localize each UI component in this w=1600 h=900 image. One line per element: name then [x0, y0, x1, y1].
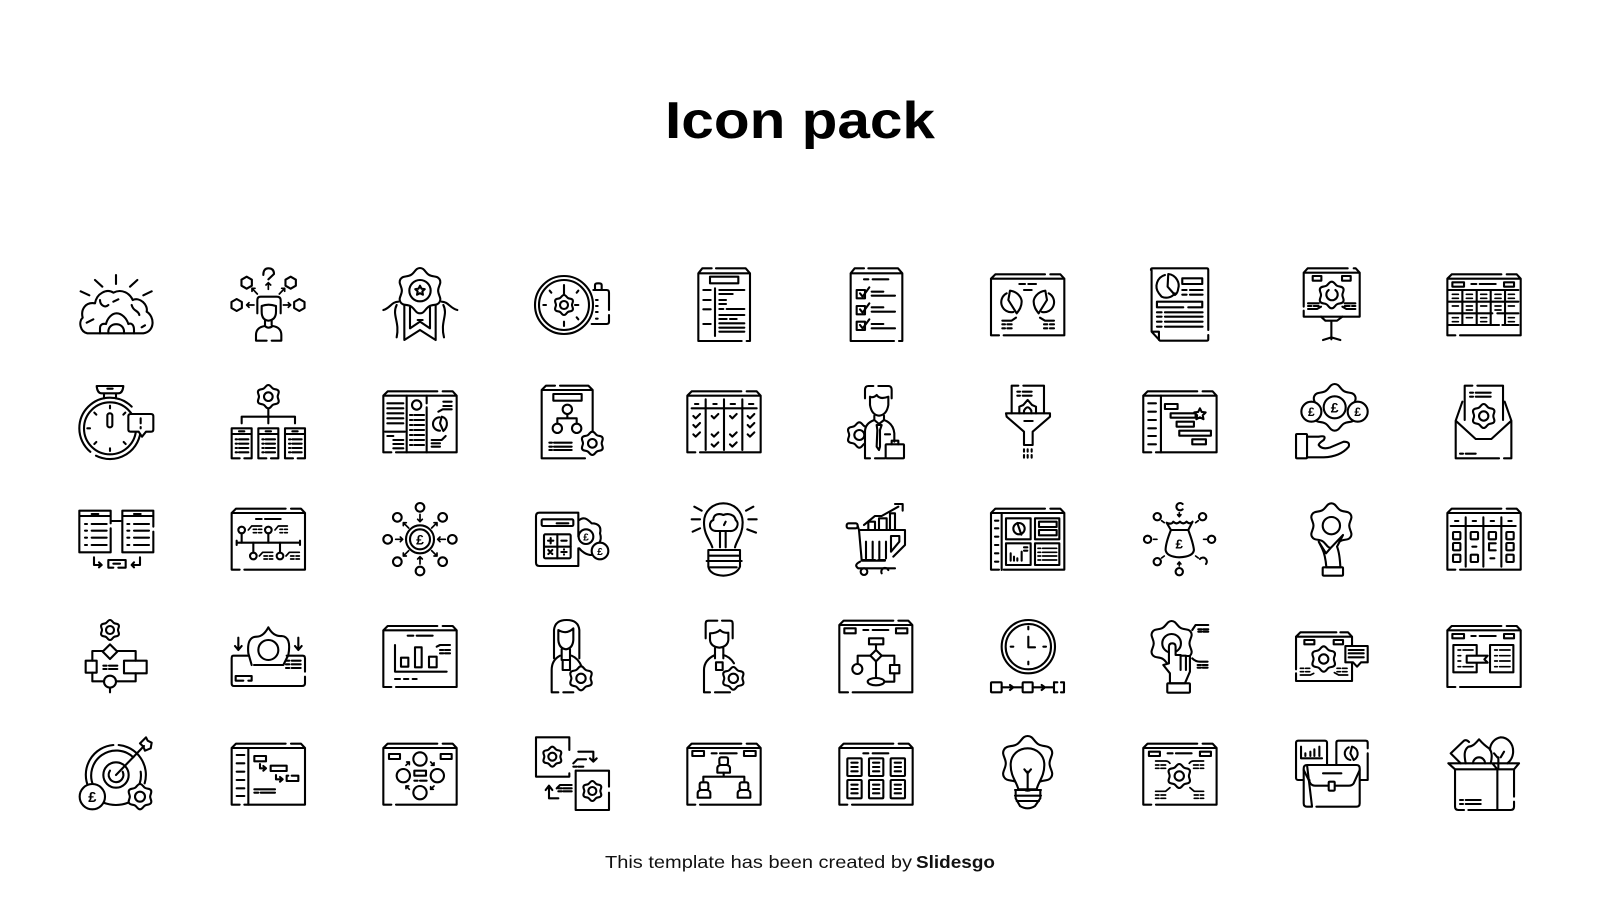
icon: two lists with arrows [79, 511, 153, 568]
icon: gear window with speech bubble [1296, 632, 1368, 681]
footer credit [605, 852, 995, 872]
icon: light bulb in gear [1003, 736, 1052, 808]
icon: target with dart, coin and gear: £ [88, 790, 96, 806]
icon: envelope with gear letter [1456, 386, 1511, 458]
icon: money bag with radial circles: £ [1176, 536, 1184, 551]
icon: calculator with pound coins: £ [583, 532, 589, 543]
icon: gear window with legends [1143, 744, 1217, 805]
icon: presentation board with gear [1304, 268, 1360, 340]
icon: finger touching gear [1152, 621, 1208, 693]
icon: award medal [383, 268, 457, 340]
icon: hand holding pound coins [1296, 384, 1368, 458]
icon: gear in tray with arrows [232, 627, 305, 686]
icon: table with status boxes [1447, 509, 1521, 570]
icon: briefcase with charts [1296, 741, 1368, 807]
icon: calendar grid [1447, 274, 1521, 335]
icon: layout window with columns [383, 391, 457, 452]
icon: timeline window [232, 509, 305, 570]
icon: hand holding gear [1311, 503, 1351, 576]
icon: pound hub with radial arrows: £ [416, 531, 424, 547]
icon: two documents exchanging [536, 737, 609, 810]
icon: gantt window with star [1143, 391, 1217, 452]
icon: cards window [839, 744, 913, 805]
icon: document with lines [698, 268, 750, 341]
icon: businesswoman with gear [552, 620, 592, 692]
icon: box of ideas [1448, 737, 1519, 810]
footer credit: This template has been created by [605, 852, 912, 872]
icon: bar chart window [383, 626, 457, 687]
icon: person with hexagon ideas [231, 268, 305, 341]
icon: flowchart window [839, 621, 912, 692]
icon: calculator with pound coins [536, 513, 608, 566]
icon: dashboard window [991, 509, 1064, 570]
icon: dial with gear and clip [535, 276, 609, 334]
icon: money bag with radial circles [1144, 503, 1215, 575]
title: Icon pack [665, 92, 935, 150]
icon: table with check marks [687, 391, 761, 452]
icon: businessman with gear and briefcase [848, 386, 904, 458]
icon: target with dart, coin and gear [80, 737, 152, 809]
icon: paper report with pie [1151, 268, 1208, 341]
icon: org chart window [687, 744, 761, 805]
icon: brain with rays [80, 275, 153, 333]
icon: funnel filtering document [1006, 386, 1050, 458]
icon: shopping cart with growth chart [847, 504, 905, 575]
icon: gear organising three tables [232, 385, 305, 458]
icon: checklist document [851, 268, 902, 341]
icon: hand holding pound coins: £ [1354, 405, 1361, 419]
icon: flow diagram with gear [86, 620, 147, 692]
icon: stopwatch with alert bubble [79, 386, 153, 459]
icon: light bulb with brain [692, 503, 757, 576]
icon: cycle window [383, 744, 457, 805]
footer credit: Slidesgo [916, 852, 995, 872]
icon: window with two pie charts [991, 274, 1064, 335]
icon: hand holding pound coins: £ [1308, 405, 1315, 419]
icon: pound hub with radial arrows [383, 503, 457, 575]
icon: gantt flow window [232, 744, 305, 805]
icon: businessman with small gear [704, 621, 744, 692]
icon: calculator with pound coins: £ [597, 547, 603, 558]
icon: document with org chart and gear [542, 386, 603, 458]
icon: clock with timeline [991, 620, 1064, 692]
icon grid [79, 268, 1521, 810]
icon: hand holding pound coins: £ [1331, 399, 1339, 415]
icon: two lists joined by ribbon window [1447, 626, 1521, 687]
